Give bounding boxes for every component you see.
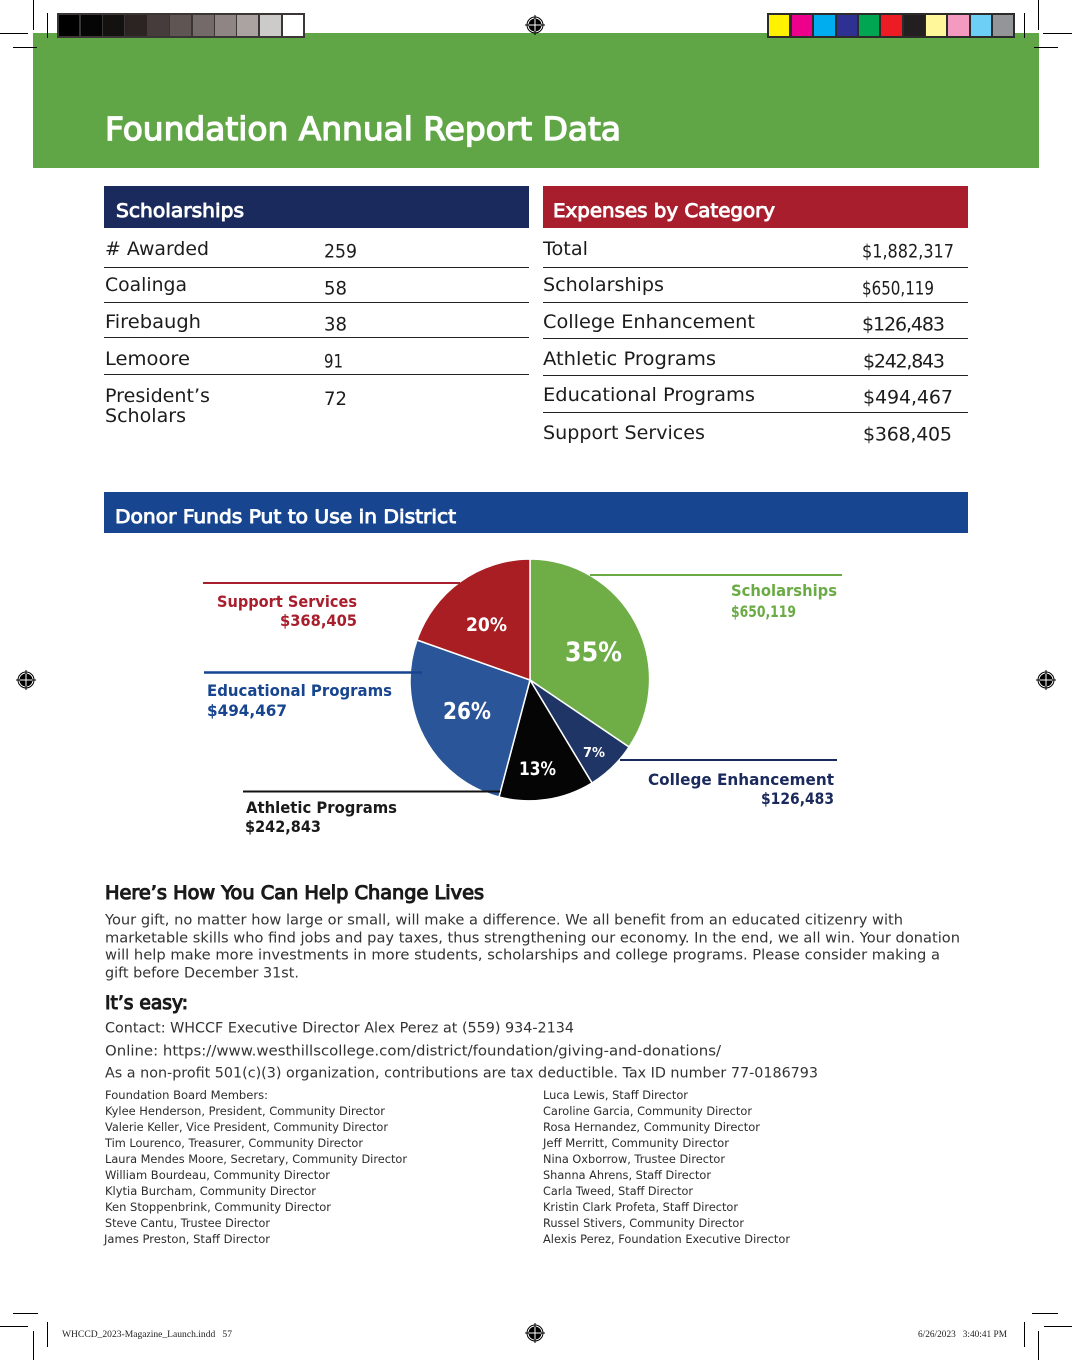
percentage labels: 20%	[466, 614, 507, 636]
row: President's Scholars: Scholars	[105, 405, 186, 427]
text block: board members right column: Shanna Ahrens, Staff Director	[543, 1168, 711, 1182]
row: educational programs: $494,467	[863, 386, 953, 408]
row: total	[542, 238, 954, 262]
text block: board members left column: William Bourdeau, Community Director	[105, 1168, 330, 1182]
row: Firebaugh: Firebaugh	[105, 311, 201, 333]
registration mark left	[16, 670, 36, 690]
label: educational programs: $494,467	[207, 701, 287, 720]
row: educational programs: Educational Programs	[543, 384, 755, 406]
text block: contact details: Contact: WHCCF Executive Director Alex Perez at (559) 934-2134	[105, 1020, 574, 1036]
row: awarded: 259	[324, 240, 357, 262]
label: support services	[217, 592, 357, 630]
row dividers	[543, 268, 968, 412]
label: college enhancement: College Enhancement	[648, 770, 834, 789]
text block: board members left column: Ken Stoppenbrink, Community Director	[105, 1200, 331, 1214]
row: President's Scholars: President’s	[105, 385, 210, 407]
text block: board members right column: Nina Oxborrow, Trustee Director	[543, 1152, 725, 1166]
footer: date stamp: 6/26/2023 3:40:41 PM	[918, 1330, 1008, 1340]
label: scholarships	[731, 581, 837, 621]
row: scholarships	[543, 274, 934, 300]
row: educational programs	[543, 384, 953, 408]
text block: appeal: marketable skills who find jobs and pay taxes, thus strengthening our economy. In the end, we all win. Your donation	[105, 930, 960, 946]
text block: board members right column: Luca Lewis, Staff Director	[543, 1088, 688, 1102]
text block: board members left column: Steve Cantu, Trustee Director	[105, 1216, 270, 1230]
slice: educational programs 26%	[410, 640, 530, 797]
row: President's Scholars: 72	[324, 388, 347, 410]
donor funds header band	[104, 492, 968, 533]
text block: board members left column: Valerie Keller, Vice President, Community Director	[105, 1120, 388, 1134]
row: Lemoore: 91	[324, 350, 343, 372]
text block: board members right column: Jeff Merritt, Community Director	[542, 1136, 729, 1150]
label: scholarships: Scholarships	[731, 581, 837, 600]
text block: board members left column: Tim Lourenco, Treasurer, Community Director	[104, 1136, 363, 1150]
row: awarded: # Awarded	[105, 238, 209, 260]
text block: board members right column: Russel Stivers, Community Director	[543, 1216, 744, 1230]
text block: board members left column: Laura Mendes Moore, Secretary, Community Director	[105, 1152, 407, 1166]
panel: expenses by category table	[542, 186, 968, 446]
text block: board members right column: Kristin Clark Profeta, Staff Director	[543, 1200, 738, 1214]
row: college enhancement	[543, 311, 945, 336]
text block: board members left column: Klytia Burcham, Community Director	[105, 1184, 316, 1198]
panel: scholarships table	[104, 186, 529, 427]
registration mark bottom	[525, 1323, 545, 1343]
row dividers	[104, 268, 529, 374]
label: college enhancement: $126,483	[761, 789, 834, 808]
row: scholarships: $650,119	[862, 278, 934, 300]
row: scholarships: Scholarships	[543, 274, 664, 296]
leader lines	[203, 575, 842, 792]
row: Firebaugh: 38	[324, 314, 347, 336]
row: Lemoore	[105, 348, 343, 372]
row: athletic programs: $242,843	[863, 350, 945, 372]
text block: board members left column: Foundation Board Members:	[105, 1088, 268, 1102]
slice: scholarships 35%	[530, 559, 650, 747]
expenses heading: Expenses by Category	[553, 200, 775, 222]
row: total: Total	[542, 238, 588, 260]
label: scholarships: $650,119	[731, 602, 796, 621]
text block: board members right column: Alexis Perez, Foundation Executive Director	[543, 1232, 790, 1246]
row: Firebaugh	[105, 311, 347, 336]
label: athletic programs: Athletic Programs	[246, 798, 397, 817]
slice: college enhancement 7%	[530, 680, 629, 783]
row: support services: Support Services	[543, 422, 705, 444]
row: total: $1,882,317	[862, 240, 954, 262]
percentage labels: 7%	[583, 746, 605, 761]
row: President's Scholars	[105, 385, 347, 427]
text block: board members right column: Caroline Garcia, Community Director	[543, 1104, 752, 1118]
text block: board members right column	[542, 1088, 790, 1246]
scholarships header band	[104, 186, 529, 228]
row: college enhancement: $126,483	[862, 314, 945, 336]
text block: board members left column: James Preston, Staff Director	[103, 1232, 270, 1246]
text block: board members left column: Kylee Henderson, President, Community Director	[105, 1104, 385, 1118]
text block: appeal: gift before December 31st.	[105, 964, 299, 982]
label: support services: $368,405	[280, 611, 357, 630]
slice: athletic programs 13%	[499, 680, 592, 801]
text block: contact details: Online: https://www.westhillscollege.com/district/foundation/giving-and-donations/	[105, 1042, 721, 1060]
title: Foundation Annual Report Data	[105, 110, 621, 148]
registration mark top	[525, 15, 545, 35]
row: athletic programs	[543, 348, 945, 372]
heading: it's easy: It’s easy:	[105, 992, 188, 1014]
slice: support services 20%	[417, 559, 530, 680]
grayscale print calibration strip	[57, 13, 305, 38]
text block: board members left column	[103, 1088, 407, 1246]
row: Lemoore: Lemoore	[105, 348, 190, 370]
percentage labels: 13%	[519, 758, 556, 780]
row: awarded	[105, 238, 357, 262]
percentage labels: 35%	[565, 637, 622, 668]
label: college enhancement	[648, 770, 834, 808]
pie chart	[203, 559, 842, 836]
label: educational programs: Educational Programs	[207, 681, 392, 700]
text block: contact details	[105, 1020, 818, 1082]
text block: appeal: Your gift, no matter how large or small, will make a difference. We all benefit from an educated citizenry with	[104, 912, 903, 928]
scholarships heading: Scholarships	[116, 200, 244, 222]
row: college enhancement: College Enhancement	[543, 311, 755, 333]
green title banner	[33, 33, 1039, 168]
text block: board members right column: Rosa Hernandez, Community Director	[543, 1120, 760, 1134]
text block: appeal: will help make more investments in more students, scholarships and college programs. Please consider making a	[105, 946, 940, 964]
registration mark right	[1036, 670, 1056, 690]
row: Coalinga: 58	[324, 278, 347, 300]
colour print calibration strip	[767, 13, 1015, 38]
label: athletic programs	[245, 798, 397, 836]
row: athletic programs: Athletic Programs	[543, 348, 716, 370]
row: support services	[543, 422, 952, 446]
text block: appeal	[104, 912, 960, 982]
row: support services: $368,405	[863, 424, 952, 446]
footer: file slug: WHCCD_2023-Magazine_Launch.indd 57	[62, 1330, 232, 1340]
row: Coalinga	[105, 274, 347, 300]
heading: how you can help: Here’s How You Can Help Change Lives	[105, 883, 484, 904]
text block: board members right column: Carla Tweed, Staff Director	[543, 1184, 693, 1198]
percentage labels	[443, 614, 622, 780]
text block: contact details: As a non-profit 501(c)(3) organization, contributions are tax deductible. Tax ID number 77-0186793	[105, 1064, 818, 1082]
expenses header band	[543, 186, 968, 228]
donor funds header band: Donor Funds Put to Use in District	[115, 506, 456, 528]
label: educational programs	[207, 681, 392, 720]
percentage labels: 26%	[443, 699, 491, 725]
row: Coalinga: Coalinga	[105, 274, 187, 296]
label: athletic programs: $242,843	[245, 817, 321, 836]
label: support services: Support Services	[217, 592, 357, 611]
